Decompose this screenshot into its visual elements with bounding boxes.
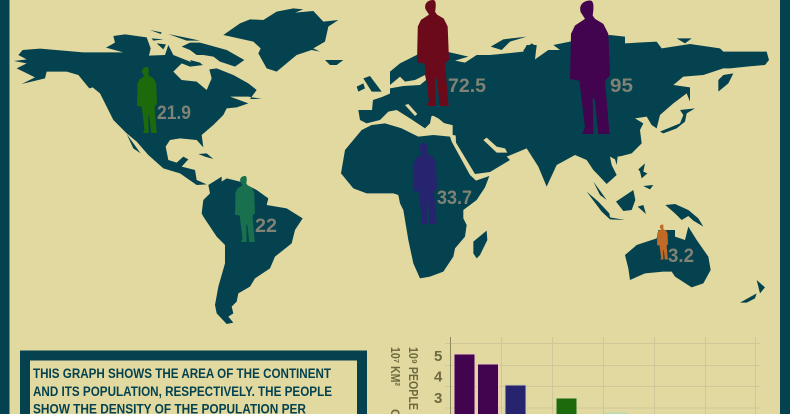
person: North America xyxy=(137,67,157,133)
continent: Australia xyxy=(625,227,765,303)
island: Madagascar xyxy=(473,231,487,258)
y axis numbers: 5 xyxy=(434,348,442,365)
value: Asia: 95 xyxy=(610,76,633,97)
person: South America xyxy=(235,176,255,242)
continent: Greenland and Iceland xyxy=(223,8,343,72)
explanation text block: THIS GRAPH SHOWS THE AREA OF THE CONTINENT xyxy=(33,366,332,381)
continent: Europe xyxy=(358,85,463,137)
islands: Southeast Asia and Oceania xyxy=(587,163,703,227)
continent: South America xyxy=(202,177,303,324)
bar: Asia population xyxy=(478,364,498,414)
value: Africa: 33.7 xyxy=(437,188,472,209)
explanation text block xyxy=(33,366,332,414)
panel: explanation text xyxy=(25,356,362,414)
y axis numbers xyxy=(434,348,443,407)
person: Australia xyxy=(657,224,668,260)
value: Europe: 72.5 xyxy=(448,76,486,97)
y axis numbers: 3 xyxy=(434,390,442,407)
continent: North America xyxy=(14,30,262,185)
person: Africa xyxy=(413,143,437,224)
value: North America: 21.9 xyxy=(157,103,191,124)
legend label: area: 10⁷ KM² xyxy=(388,347,403,387)
person: Europe xyxy=(417,0,449,106)
continent: Asia xyxy=(390,35,769,187)
bar: Africa xyxy=(505,385,526,414)
value: South America: 22 xyxy=(255,216,277,237)
world map xyxy=(14,8,769,324)
islands: Britain and Ireland xyxy=(357,76,382,92)
bar: North America xyxy=(556,398,577,414)
density values xyxy=(157,76,694,267)
bar: South America xyxy=(605,412,628,414)
value: Australia: 3.2 xyxy=(668,246,694,267)
continent: Africa xyxy=(341,123,489,278)
bar: Asia area xyxy=(454,354,475,414)
person: Asia xyxy=(570,0,610,134)
y axis numbers: 4 xyxy=(434,368,443,386)
explanation text block: AND ITS POPULATION, RESPECTIVELY. THE PEOPLE xyxy=(33,384,332,399)
bar chart xyxy=(388,337,760,414)
inland seas xyxy=(390,75,507,153)
